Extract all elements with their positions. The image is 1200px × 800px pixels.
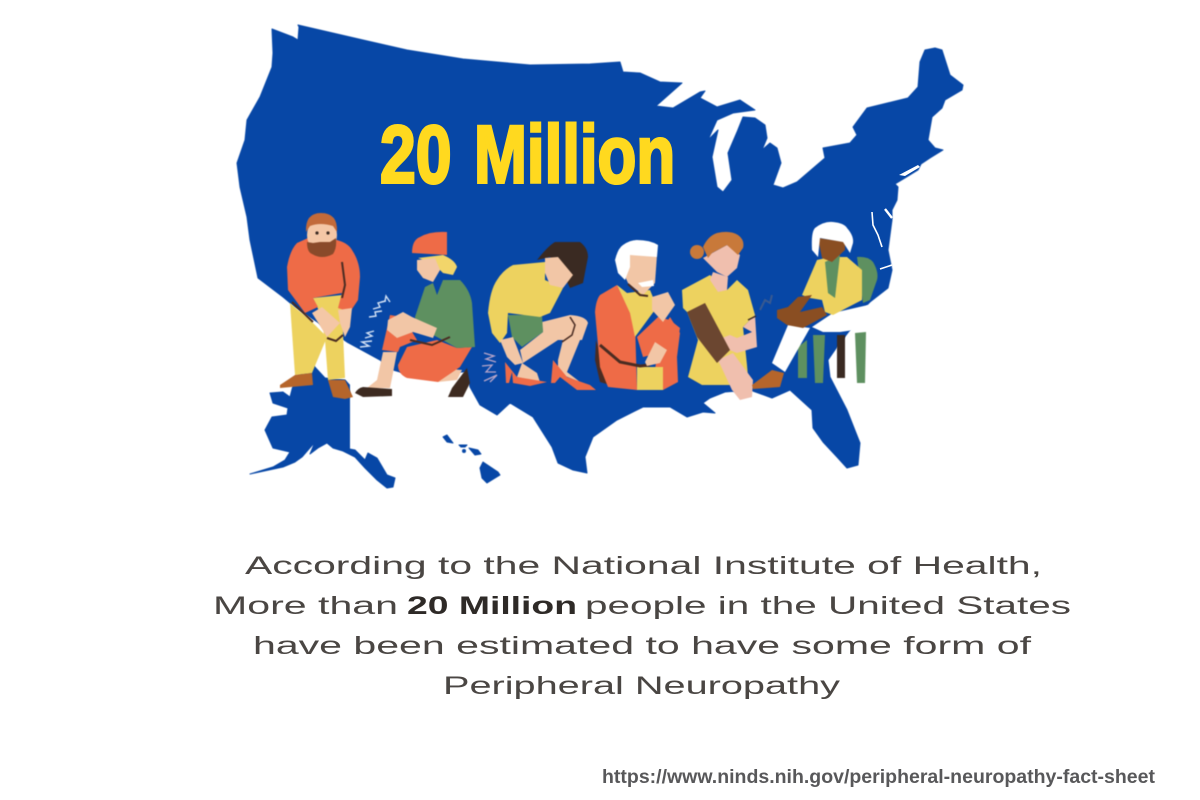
line 2: More than (213, 592, 398, 620)
icon: pain sparks at knee (360, 296, 390, 347)
line 2: people in the United States (585, 592, 1071, 620)
person 1: man holding knee (280, 213, 360, 399)
headline: 20 Million (380, 108, 675, 200)
body text (213, 552, 1071, 700)
person 4: older man holding arm (595, 240, 680, 390)
green chair (798, 257, 878, 383)
source URL: https://www.ninds.nih.gov/peripheral-neuropathy-fact-sheet (602, 767, 1156, 788)
person 2: woman in hat kneeling (355, 232, 475, 397)
icon: pain sparks at ankle (482, 353, 497, 382)
person 5: woman with arm brace (682, 232, 757, 400)
line 1: According to the National Institute of Health, (245, 552, 1042, 580)
map of the United States (237, 25, 963, 488)
Alaska (250, 365, 395, 488)
person 3: crouching woman in heels (488, 242, 596, 390)
contiguous states (237, 25, 963, 473)
icon: pain spark near arm (760, 295, 772, 310)
figures: six people in pain (280, 213, 878, 400)
Hawaii (443, 435, 500, 483)
headline: 20 Million: 20 (380, 108, 452, 200)
person 6: woman sitting on chair (752, 222, 878, 389)
line 3: have been estimated to have some form of (253, 632, 1031, 660)
line 2: 20 Million (407, 592, 577, 620)
line 4: Peripheral Neuropathy (443, 672, 841, 700)
coastal inlets (872, 165, 920, 269)
line 2 (213, 592, 1071, 620)
headline: 20 Million: Million (474, 109, 675, 200)
